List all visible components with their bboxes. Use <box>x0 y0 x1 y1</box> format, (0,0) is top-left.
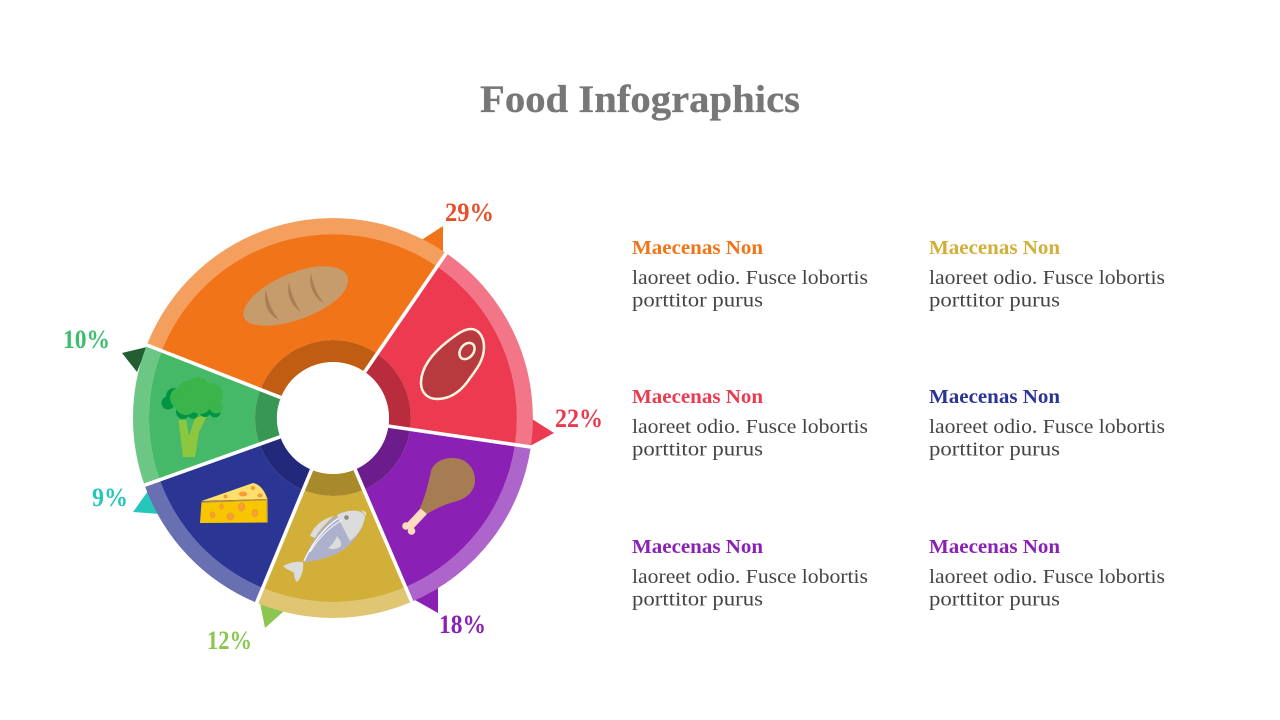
label: 29%: 29% <box>445 198 494 227</box>
icon: bread <box>243 266 348 326</box>
wedge: green 10% <box>133 345 281 485</box>
text block: orange <box>632 238 868 312</box>
icon: broccoli <box>162 377 223 457</box>
text block: orange: laoreet odio. Fusce lobortis <box>632 267 868 289</box>
text block: orange: porttitor purus <box>632 290 763 312</box>
text block: purple right: porttitor purus <box>929 588 1060 610</box>
text block: purple left: Maecenas Non <box>632 537 763 558</box>
label: 12%: 12% <box>207 626 252 655</box>
text block: red: Maecenas Non <box>632 387 763 408</box>
pointer: purple <box>415 588 438 613</box>
text block: red: porttitor purus <box>632 438 763 460</box>
pointer: red <box>530 419 554 446</box>
icon: chicken drumstick <box>402 458 475 535</box>
icon: steak <box>421 329 484 399</box>
text block: gold: laoreet odio. Fusce lobortis <box>929 267 1165 289</box>
text block: red: laoreet odio. Fusce lobortis <box>632 416 868 438</box>
text block: navy: porttitor purus <box>929 438 1060 460</box>
text block: gold: Maecenas Non <box>929 238 1060 259</box>
text block: navy <box>929 387 1165 460</box>
title: Food Infographics <box>480 78 800 121</box>
wedge: orange 29% <box>147 218 446 398</box>
icon: fish <box>283 510 366 582</box>
pointer: teal <box>133 491 160 514</box>
pointer: orange <box>420 226 443 259</box>
pointer: lime <box>260 603 284 628</box>
text block: purple left: laoreet odio. Fusce lobortis <box>632 566 868 588</box>
text block: orange: Maecenas Non <box>632 238 763 259</box>
text block: purple right <box>929 537 1165 610</box>
wedge: red 22% <box>365 253 533 447</box>
icon: cheese <box>200 483 268 523</box>
text block: purple right: Maecenas Non <box>929 537 1060 558</box>
donut chart <box>122 218 554 628</box>
text block: purple left: porttitor purus <box>632 588 763 610</box>
label: 18%: 18% <box>439 610 486 639</box>
text block: navy: laoreet odio. Fusce lobortis <box>929 416 1165 438</box>
wedge: purple 18% <box>355 426 531 602</box>
text block: gold: porttitor purus <box>929 290 1060 312</box>
label: 22%: 22% <box>555 404 603 433</box>
text block: red <box>632 387 868 460</box>
text block: purple right: laoreet odio. Fusce lobortis <box>929 566 1165 588</box>
pointer: dark green <box>122 347 147 372</box>
text block: gold <box>929 238 1165 312</box>
label: 9%: 9% <box>92 483 128 512</box>
wedge: navy 9% <box>145 437 312 603</box>
label: 10%: 10% <box>63 325 110 354</box>
wedge: gold 12% <box>257 470 412 618</box>
text block: navy: Maecenas Non <box>929 387 1060 408</box>
text block: purple left <box>632 537 868 610</box>
